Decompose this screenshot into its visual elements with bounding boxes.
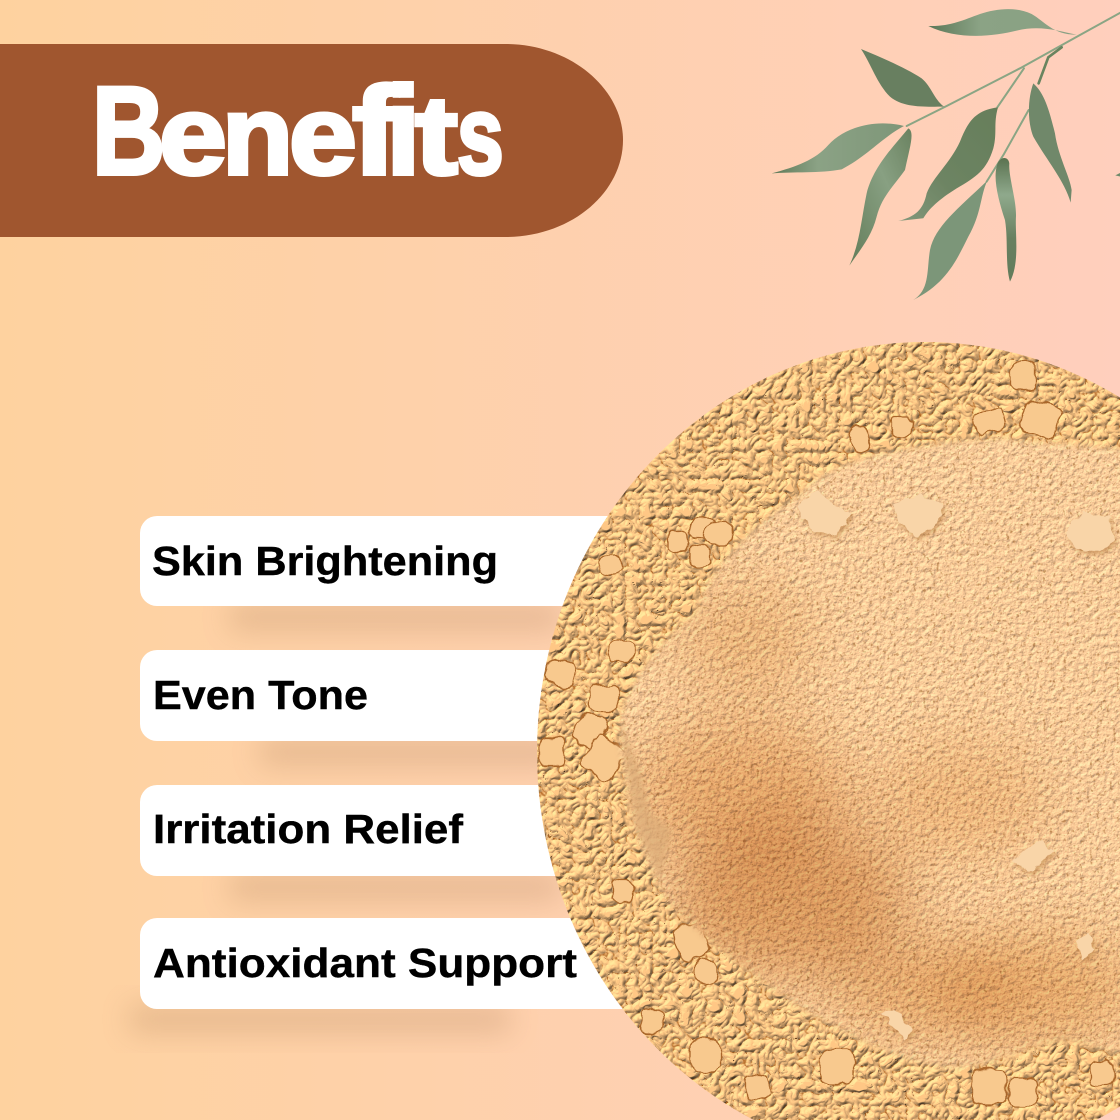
card shadows — [130, 604, 560, 1032]
card: Antioxidant Support: Antioxidant Support — [153, 940, 577, 986]
mound of powder — [600, 430, 1120, 1080]
title: Benefits: B — [92, 62, 165, 201]
title: Benefits: i — [386, 62, 421, 201]
icon: leafy branch — [772, 9, 1120, 300]
leaf right — [1029, 83, 1072, 203]
card: Even Tone — [140, 650, 700, 741]
leaf lower left — [849, 128, 912, 266]
title: Benefits: e — [289, 73, 357, 198]
cliff face — [621, 727, 672, 876]
card: Antioxidant Support — [140, 918, 700, 1009]
crumb bed — [530, 335, 1120, 1120]
title: Benefits: s — [457, 73, 504, 198]
card: Irritation Relief: Irritation Relief — [153, 806, 463, 852]
title: Benefits — [92, 62, 504, 201]
loose crumbs around the mound — [540, 362, 1114, 1106]
title: Benefits: t — [415, 73, 458, 198]
leaf bottom — [913, 181, 987, 300]
title: Benefits: f — [352, 62, 398, 201]
title: Benefits: e — [159, 73, 227, 198]
panel: benefit list — [130, 516, 700, 1032]
clumps on the mound — [796, 492, 1116, 1040]
mound shade — [630, 585, 1120, 1050]
stems — [907, 12, 1120, 182]
title banner shape — [0, 44, 623, 237]
card: Irritation Relief — [140, 785, 700, 876]
leaf top — [928, 9, 1077, 36]
card: Even Tone: Even Tone — [153, 672, 368, 718]
small leaf tip — [1115, 173, 1120, 177]
card: Skin Brightening — [140, 516, 700, 606]
leaf thin centre — [996, 158, 1016, 282]
card: Skin Brightening: Skin Brightening — [152, 538, 498, 584]
leaf far left — [772, 123, 904, 173]
title: Benefits: n — [222, 73, 293, 198]
powder photo circle — [530, 335, 1120, 1120]
leaf upper left — [861, 49, 944, 107]
leaf centre — [898, 107, 998, 221]
